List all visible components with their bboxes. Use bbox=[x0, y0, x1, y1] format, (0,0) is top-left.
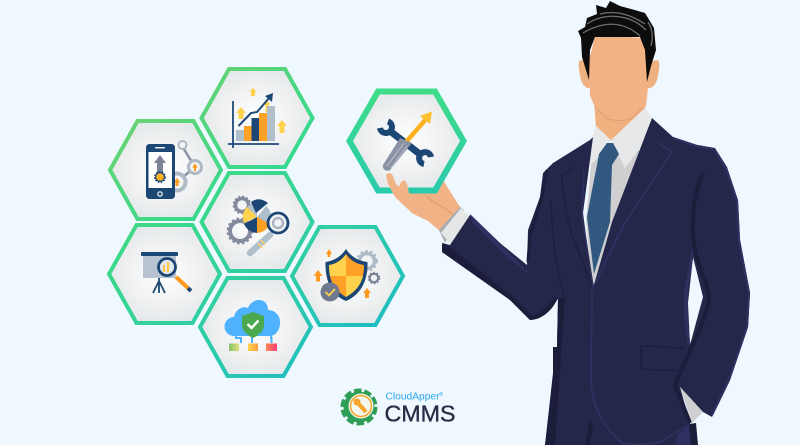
hair bbox=[578, 1, 656, 82]
jacket gap beside arm bbox=[688, 257, 703, 345]
hand palm bbox=[405, 180, 462, 231]
registered mark: ® bbox=[440, 391, 444, 398]
hexagon: cloud security bbox=[200, 278, 311, 376]
hexagon: wrench and screwdriver bbox=[350, 92, 464, 190]
collar bbox=[589, 108, 652, 168]
hexagon: pie chart, gears and magnifier bbox=[202, 173, 312, 271]
neck bbox=[594, 90, 646, 141]
palm crease bbox=[427, 196, 456, 220]
hexagon: presentation board bbox=[109, 225, 220, 323]
arm shadow bbox=[442, 243, 532, 320]
hidden sleeve cuff bbox=[680, 387, 703, 423]
hexagon: growth chart bbox=[202, 69, 312, 167]
arm highlight bbox=[470, 214, 531, 276]
shirt cuff bbox=[439, 207, 471, 246]
trouser bbox=[676, 425, 697, 445]
jacket shadows bbox=[528, 168, 709, 423]
logo: CloudApper CMMS bbox=[342, 390, 456, 426]
hexagon: mobile phone bbox=[110, 121, 221, 219]
ears bbox=[579, 60, 659, 88]
man in suit bbox=[439, 1, 750, 445]
face bbox=[589, 36, 648, 121]
logo product name: CMMS bbox=[384, 400, 456, 426]
jacket highlights bbox=[582, 138, 749, 445]
logo gear bbox=[342, 390, 376, 424]
hand fingers over hexagon bbox=[386, 173, 424, 219]
trouser shadow bbox=[689, 423, 698, 445]
hexagon: security shield bbox=[292, 227, 403, 325]
elbow shadow bbox=[528, 296, 557, 320]
logo wordmark: CloudApper bbox=[386, 390, 440, 402]
left trouser seam bbox=[585, 420, 593, 445]
jaw line bbox=[595, 107, 643, 120]
tie bbox=[587, 143, 619, 274]
jacket bbox=[442, 118, 750, 445]
shirt bbox=[586, 150, 640, 290]
body side shadow bbox=[545, 297, 565, 445]
